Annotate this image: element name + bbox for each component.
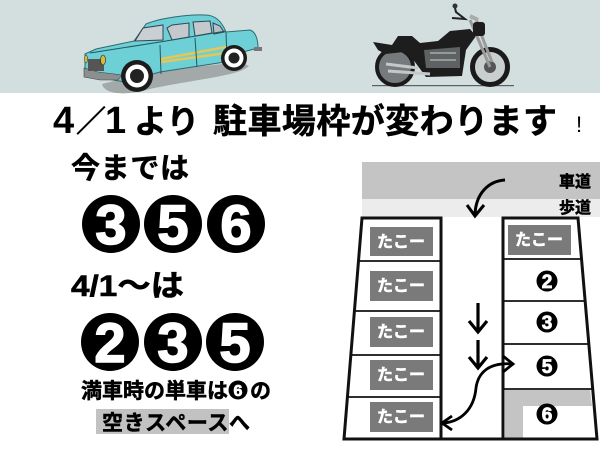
left bay labels: たこー <box>377 272 425 296</box>
current numbers 3 5 6: 5 <box>157 193 189 256</box>
note: full bikes line 1: 6 <box>234 383 243 400</box>
title: より <box>134 95 199 143</box>
right bay label: たこー <box>515 226 563 250</box>
sidewalk: 歩道 <box>559 194 591 218</box>
road: 車道 <box>559 168 591 192</box>
bay number 5 <box>536 356 558 378</box>
icon: blue car <box>84 15 262 93</box>
left bay labels: たこー <box>377 318 425 342</box>
title <box>53 94 582 143</box>
arrow: entrance curve <box>467 180 505 216</box>
title: 駐車場枠が変わります <box>213 94 557 143</box>
new numbers 2 3 5 <box>81 311 264 374</box>
header band <box>0 0 600 93</box>
new numbers 2 3 5: 2 <box>94 311 126 374</box>
left bay labels: たこー <box>377 361 425 385</box>
parking outline <box>344 218 597 439</box>
current numbers 3 5 6 <box>82 193 265 256</box>
current numbers 3 5 6: 3 <box>95 193 127 256</box>
title: ／ <box>76 97 106 141</box>
arrow: down 1 <box>469 303 487 332</box>
title: 1 <box>105 100 126 142</box>
new numbers 2 3 5: 5 <box>219 311 251 374</box>
bay number 6 <box>536 404 558 426</box>
heading: from April 1: 4/1〜は <box>71 270 184 303</box>
road <box>362 162 600 199</box>
bay 6 shaded area <box>505 390 592 438</box>
bay number 2: 2 <box>542 272 552 293</box>
note: full bikes line 1: の <box>250 375 271 405</box>
left bay labels <box>370 227 433 432</box>
bay number 3: 3 <box>542 313 552 334</box>
arrow: double-headed curve <box>442 356 513 430</box>
arrow: down 2 <box>469 340 487 368</box>
note: empty space line 2: 空きスペースへ <box>102 407 250 437</box>
icon: motorcycle <box>372 4 514 86</box>
left bay labels: たこー <box>377 228 425 252</box>
bay number 3 <box>536 312 558 334</box>
note: full bikes line 1: 満車時の単車は <box>81 375 228 405</box>
new numbers 2 3 5: 3 <box>157 311 189 374</box>
left parking dividers <box>346 261 441 397</box>
sidewalk <box>362 194 600 218</box>
right bay label <box>508 225 571 255</box>
title: 4 <box>53 100 74 142</box>
bay number 5: 5 <box>542 357 553 378</box>
heading: until now: 今までは <box>71 145 189 187</box>
parking diagram <box>344 218 597 439</box>
bay number 2 <box>536 270 558 293</box>
right parking dividers <box>503 259 593 389</box>
current numbers 3 5 6: 6 <box>220 193 252 256</box>
bay number 6: 6 <box>542 405 552 426</box>
left bay labels: たこー <box>377 403 425 427</box>
title: ! <box>576 112 582 137</box>
